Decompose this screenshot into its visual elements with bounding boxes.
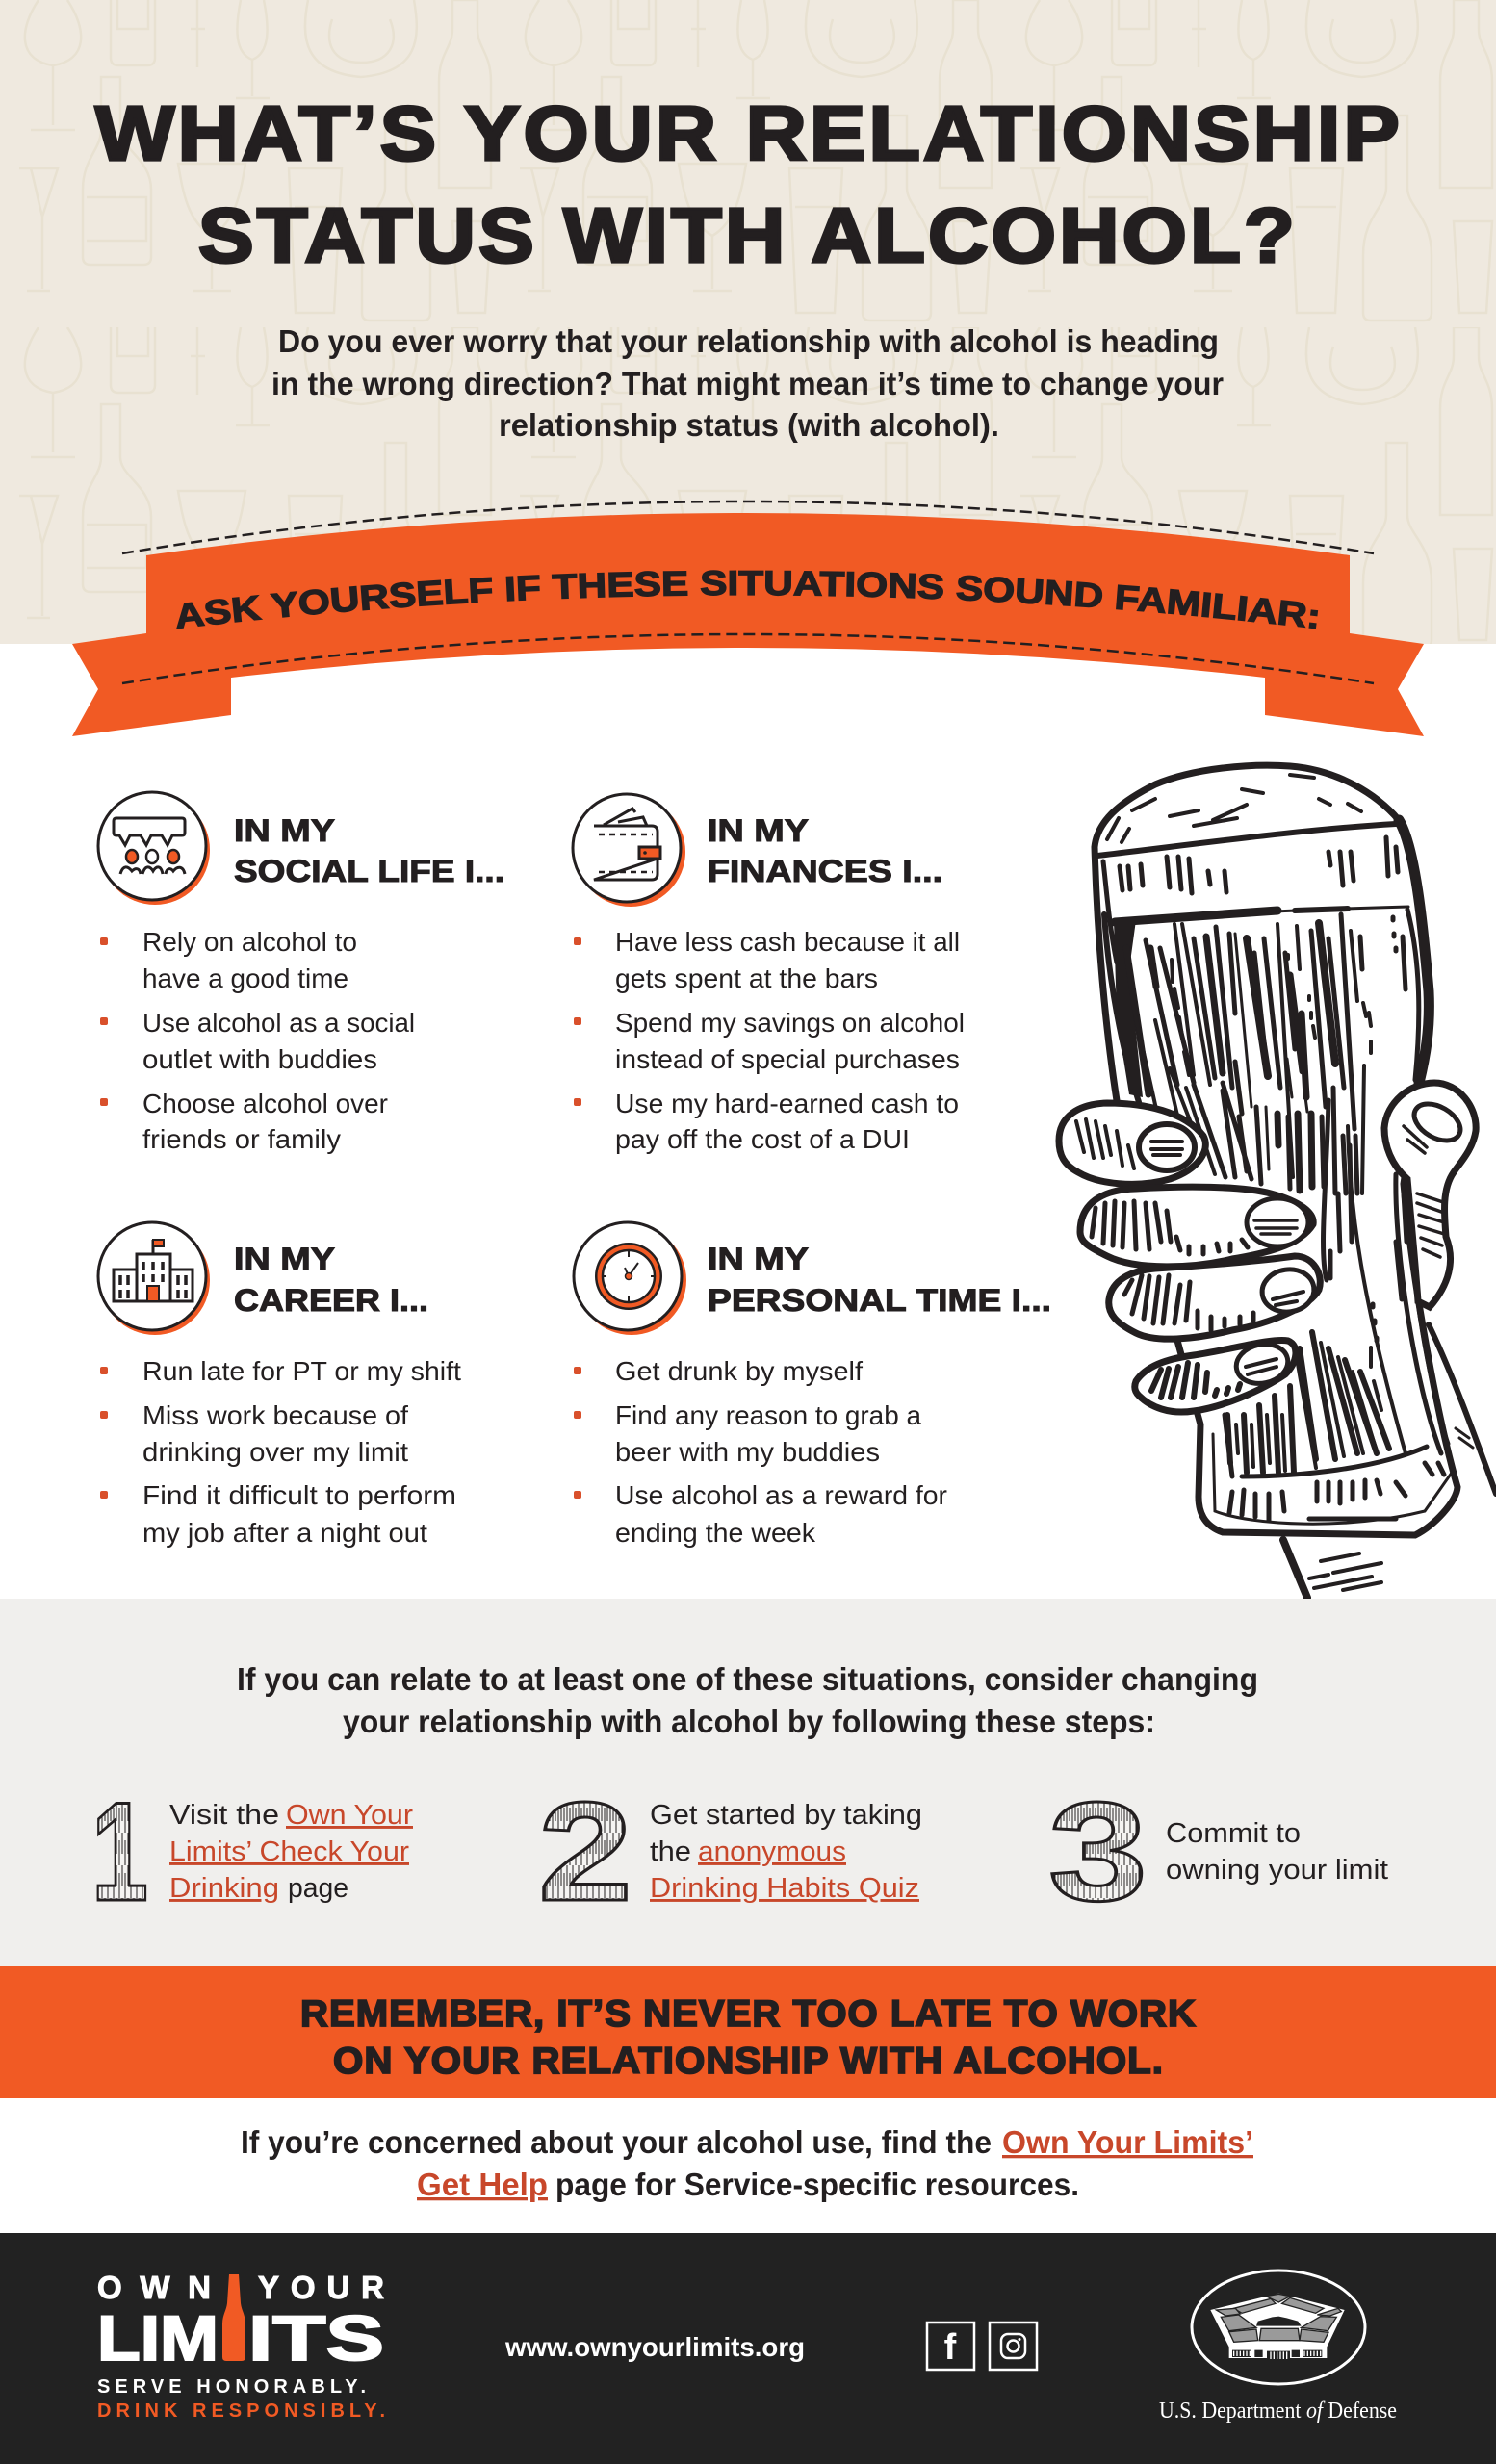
logo: Own Your Limits: ITS (248, 2302, 384, 2374)
help text: Own Your Limits’ (1002, 2124, 1253, 2160)
panel: personal time (574, 1222, 1051, 1548)
intro text: relationship status (with alcohol). (499, 407, 999, 443)
step 2: Get started by taking (650, 1800, 922, 1831)
finger 3 (1109, 1256, 1320, 1339)
heading: CAREER I... (234, 1283, 428, 1318)
step 3 (1048, 1773, 1388, 1930)
logo: Own Your Limits: DRINK RESPONSIBLY. (97, 2400, 385, 2422)
bullet list: drinking over my limit (142, 1437, 408, 1467)
intro text: Do you ever worry that your relationship with alcohol is heading (278, 323, 1219, 359)
panel: career (98, 1222, 461, 1548)
step 2 (538, 1773, 922, 1930)
bullet list (100, 1356, 461, 1548)
bullet list: Rely on alcohol to (142, 927, 357, 957)
bullet list: Run late for PT or my shift (142, 1356, 461, 1386)
step 3: Commit to (1166, 1818, 1301, 1849)
heading (708, 813, 942, 888)
base hatching (1229, 1463, 1444, 1521)
icon: instagram (990, 2323, 1037, 2370)
panel: orange reminder band: ON YOUR RELATIONSHIP WITH ALCOHOL. (333, 2040, 1164, 2082)
bullet list: have a good time (142, 963, 348, 993)
step 2: 2 (538, 1773, 632, 1930)
panel: footer (0, 2233, 1496, 2464)
bullet list: Spend my savings on alcohol (615, 1008, 965, 1038)
lower beer hatching (1227, 1332, 1389, 1473)
icon: clock (574, 1222, 686, 1335)
intro text (271, 323, 1224, 443)
thumb (1384, 1083, 1476, 1307)
bullet list: Find it difficult to perform (142, 1480, 456, 1510)
step 1 (91, 1773, 413, 1930)
step 3: 3 (1048, 1773, 1148, 1930)
logo: Own Your Limits: YOUR (258, 2270, 384, 2305)
help text: Get Help (417, 2167, 548, 2202)
step 1: Visit the (169, 1800, 279, 1831)
step 1: Limits’ Check Your (169, 1836, 409, 1867)
steps intro (237, 1661, 1258, 1739)
step 2: Drinking Habits Quiz (650, 1873, 919, 1904)
logo: Own Your Limits: LIM (97, 2302, 219, 2374)
heading: PERSONAL TIME I... (708, 1283, 1051, 1318)
bullet list: Choose alcohol over (142, 1089, 388, 1118)
wrist (1283, 1324, 1496, 1598)
beer hatching, wide strokes (1247, 923, 1335, 1076)
bullet list: Use my hard-earned cash to (615, 1089, 959, 1118)
bullet list: Find any reason to grab a (615, 1400, 921, 1430)
bullet list: ending the week (615, 1518, 816, 1548)
heading (234, 813, 504, 888)
heading: IN MY (234, 1242, 335, 1276)
title (95, 90, 1403, 278)
icon: facebook (927, 2323, 974, 2370)
heading (234, 1242, 428, 1318)
finger 2 (1080, 1187, 1313, 1267)
bullet list: Get drunk by myself (615, 1356, 863, 1386)
mid-glass hatching (1330, 1145, 1377, 1341)
illustration: hand holding beer glass (1059, 765, 1496, 1598)
panel: orange reminder band: REMEMBER, IT’S NEVER TOO LATE TO WORK (300, 1993, 1197, 2035)
step 1: Own Your (286, 1800, 413, 1831)
step 1: 1 (91, 1773, 148, 1930)
bullet list: outlet with buddies (142, 1044, 377, 1074)
logo: Own Your Limits (97, 2270, 385, 2422)
bullet list: Miss work because of (142, 1400, 408, 1430)
step 2: anonymous (698, 1836, 846, 1867)
icon: building (98, 1222, 210, 1335)
logo: Own Your Limits: OWN (97, 2270, 211, 2305)
heading: FINANCES I... (708, 854, 942, 888)
bullet list: beer with my buddies (615, 1437, 880, 1467)
step 2: the (650, 1836, 691, 1867)
bullet list: Have less cash because it all (615, 927, 960, 957)
bullet list: Use alcohol as a social (142, 1008, 415, 1038)
foam and beer lines (1097, 775, 1452, 1524)
bullet list (574, 1356, 947, 1548)
banner heading: ASK YOURSELF IF THESE SITUATIONS SOUND FAMILIAR: (176, 570, 1319, 629)
banner ribbon (72, 500, 1424, 736)
step 1: Drinking (169, 1873, 279, 1904)
heading: IN MY (708, 813, 809, 848)
bullet list (574, 927, 965, 1154)
bullet list: instead of special purchases (615, 1044, 960, 1074)
title: STATUS WITH ALCOHOL? (198, 192, 1298, 278)
icon: social group (98, 792, 210, 905)
glass outline (1095, 765, 1457, 1535)
panel: steps section (0, 1599, 1496, 1966)
step 3: owning your limit (1166, 1855, 1388, 1886)
logo: Department of Defense seal (1192, 2271, 1365, 2384)
background: beige header with bottle pattern (0, 0, 1496, 644)
icon: wallet (573, 794, 685, 907)
bullet list: gets spent at the bars (615, 963, 878, 993)
title: WHAT’S YOUR RELATIONSHIP (95, 90, 1403, 176)
bullet list (100, 927, 415, 1154)
bullet list: friends or family (142, 1124, 341, 1154)
logo: Own Your Limits: SERVE HONORABLY. (97, 2376, 366, 2398)
bullet list: pay off the cost of a DUI (615, 1124, 910, 1154)
finger 1 (1059, 1103, 1205, 1184)
step 1: page (288, 1873, 348, 1904)
website: www.ownyourlimits.org (504, 2332, 805, 2362)
bullet list: Use alcohol as a reward for (615, 1480, 947, 1510)
help text: If you’re concerned about your alcohol use, find the (241, 2124, 992, 2160)
heading: SOCIAL LIFE I... (234, 854, 504, 888)
panel: orange reminder band (0, 1966, 1496, 2098)
help text (241, 2124, 1253, 2202)
finger 4 (1135, 1340, 1296, 1412)
icon: facebook: f (944, 2327, 957, 2368)
heading (708, 1242, 1051, 1318)
heading: IN MY (234, 813, 335, 848)
steps intro: your relationship with alcohol by following these steps: (343, 1704, 1155, 1739)
intro text: in the wrong direction? That might mean it’s time to change your (271, 366, 1224, 401)
steps intro: If you can relate to at least one of these situations, consider changing (237, 1661, 1258, 1697)
bullet list: my job after a night out (142, 1518, 427, 1548)
panel: finances (573, 794, 965, 1154)
panel: social life (98, 792, 504, 1154)
text: U.S. Department of Defense: U.S. Department of Defense (1159, 2399, 1397, 2424)
heading: IN MY (708, 1242, 809, 1276)
help text: page for Service-specific resources. (555, 2167, 1079, 2202)
